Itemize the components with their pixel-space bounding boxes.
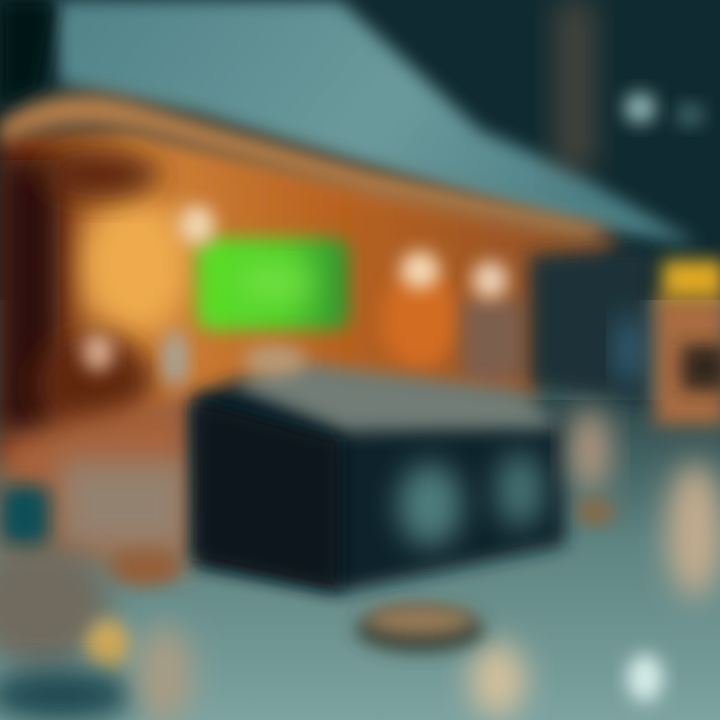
dark counter [195,344,565,592]
counter pictogram left [398,463,462,547]
floor reflections [137,408,720,720]
dark display panel [530,248,650,405]
background: floor [0,400,720,720]
neighbouring yellow shop [655,260,720,425]
floor band and left counter [0,390,195,720]
hanging sign [555,0,595,170]
panel: orange shop wall [0,130,620,470]
wall lights [82,92,704,372]
green screen [197,238,349,330]
roof band [0,94,610,240]
counter pictogram right [496,452,544,528]
background: upper wall and ceiling [0,0,720,300]
round floor mat [356,605,484,652]
